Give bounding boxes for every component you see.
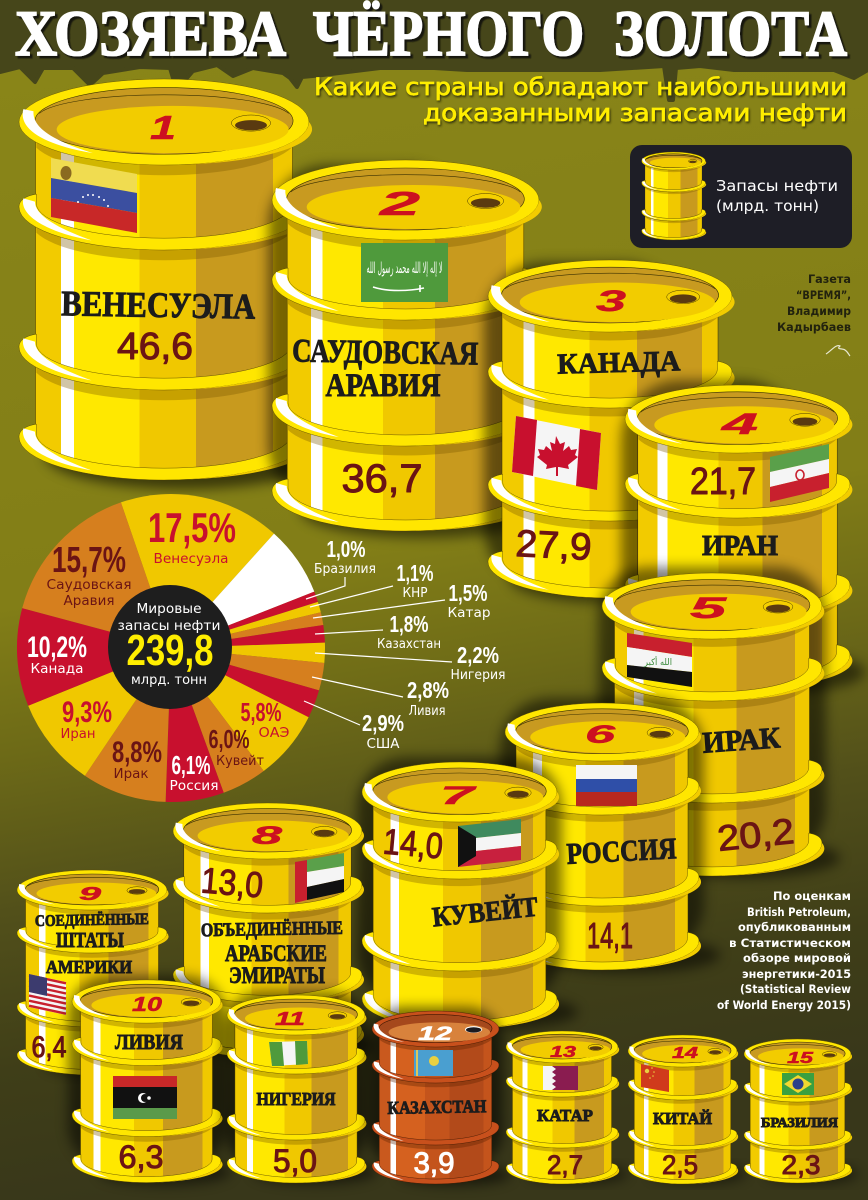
value: 2,7 xyxy=(547,1150,583,1180)
barrel 5: Iraq xyxy=(598,567,840,878)
source note: По оценкам xyxy=(773,889,851,903)
country name: РОССИЯ xyxy=(566,832,678,871)
external labels: 2,2% xyxy=(457,642,499,668)
external labels: Казахстан xyxy=(377,637,441,652)
country name xyxy=(201,918,343,988)
source note: British Petroleum, xyxy=(747,905,851,919)
leader lines xyxy=(304,577,452,725)
drum xyxy=(19,79,312,480)
country name: КАЗАХСТАН xyxy=(387,1096,487,1118)
shadow xyxy=(205,1030,375,1060)
country name: ОБЪЕДИНЁННЫЕ xyxy=(201,918,343,941)
external labels: Катар xyxy=(448,606,490,621)
source note: of World Energy 2015) xyxy=(717,998,851,1012)
source note: обзоре мировой xyxy=(743,951,851,965)
slice labels: 17,5% xyxy=(148,504,236,551)
shadow xyxy=(598,567,840,878)
external labels: 2,9% xyxy=(362,710,404,736)
value: 14,0 xyxy=(381,821,445,867)
slice labels: 15,7% xyxy=(52,539,126,580)
flag: Canada xyxy=(512,416,601,490)
slice labels: 10,2% xyxy=(27,631,87,664)
flag: Iraq xyxy=(627,633,692,687)
country name: АМЕРИКИ xyxy=(46,957,132,977)
shadow xyxy=(500,698,720,973)
drum xyxy=(372,1011,499,1184)
external labels: Нигерия xyxy=(450,668,506,683)
country name: БРАЗИЛИЯ xyxy=(761,1115,838,1130)
external labels: 2,8% xyxy=(407,677,449,703)
rank: 1 xyxy=(150,109,176,146)
shadow xyxy=(223,991,377,1184)
value: 6,3 xyxy=(118,1139,164,1175)
value: 27,9 xyxy=(515,523,593,569)
country name: КУВЕЙТ xyxy=(431,892,540,934)
external labels: Бразилия xyxy=(314,562,376,577)
drum xyxy=(173,803,364,1058)
country name: КАТАР xyxy=(537,1106,593,1125)
slice labels: Канада xyxy=(30,662,84,677)
drum xyxy=(362,762,559,1029)
country name: ЛИВИЯ xyxy=(115,1030,183,1054)
source note: (Statistical Review xyxy=(740,982,851,996)
rank: 9 xyxy=(79,884,101,904)
barrel 9: USA xyxy=(17,870,175,1077)
barrel 10: Libya xyxy=(68,976,231,1185)
value: 2,5 xyxy=(662,1150,698,1180)
country name: ИРАК xyxy=(701,721,782,760)
barrel 1: Venezuela xyxy=(19,79,325,489)
value: 6,4 xyxy=(32,1031,66,1064)
slice labels xyxy=(27,504,290,794)
country name: ВЕНЕСУЭЛА xyxy=(61,283,256,327)
barrel 2: Saudi Arabia xyxy=(268,160,550,538)
title xyxy=(15,0,847,70)
barrel 12: Kazakhstan xyxy=(368,1007,511,1185)
rank: 8 xyxy=(252,822,282,850)
shadow xyxy=(45,421,325,489)
flag: Nigeria xyxy=(269,1041,308,1066)
value: 21,7 xyxy=(690,461,756,503)
drum xyxy=(602,573,824,876)
shadow xyxy=(268,165,550,538)
shadow xyxy=(357,757,578,1029)
barrel 15: Brazil xyxy=(744,1039,858,1184)
rank: 11 xyxy=(275,1009,305,1029)
centre disc: 239,8 xyxy=(126,626,214,675)
country name: САУДОВСКАЯ xyxy=(292,333,479,373)
credit text: Газета xyxy=(808,272,851,286)
external labels: 1,8% xyxy=(390,611,428,637)
flag: Iraq: الله أكبر xyxy=(643,656,672,668)
drum xyxy=(488,260,735,598)
country name xyxy=(35,910,149,977)
shadow xyxy=(484,262,740,604)
rank: 13 xyxy=(550,1044,576,1061)
credit text: Владимир xyxy=(787,304,851,318)
shadow xyxy=(45,1053,175,1077)
legend text: (млрд. тонн) xyxy=(716,197,819,215)
subtitle: доказанными запасами нефти xyxy=(423,99,847,127)
flag: Brazil xyxy=(782,1073,814,1095)
subtitle: Какие страны обладают наибольшими xyxy=(314,73,847,101)
rank: 3 xyxy=(596,285,627,318)
dripping oil header band xyxy=(0,0,868,100)
title: ХОЗЯЕВА xyxy=(15,0,286,70)
rank: 10 xyxy=(132,994,162,1016)
external labels: КНР xyxy=(402,586,428,601)
country name: КИТАЙ xyxy=(653,1109,712,1128)
flag: Kazakhstan xyxy=(414,1050,453,1076)
slice labels: ОАЭ xyxy=(258,726,290,741)
value: 5,0 xyxy=(273,1143,317,1179)
drum xyxy=(744,1039,852,1183)
shadow xyxy=(368,1007,511,1185)
country name: ИРАН xyxy=(702,530,778,562)
slice labels: 6,1% xyxy=(172,750,210,780)
credit text: Кадырбаев xyxy=(777,320,851,334)
legend text: Запасы нефти xyxy=(716,177,838,195)
barrel 3: Canada xyxy=(484,260,740,604)
slice labels: Кувейт xyxy=(216,754,264,769)
country name: АРАВИЯ xyxy=(326,368,441,404)
shadow xyxy=(621,380,865,694)
centre disc: запасы нефти xyxy=(118,619,220,634)
flag: USA xyxy=(29,974,66,1015)
drum xyxy=(625,385,852,689)
barrel 4: Iran xyxy=(621,380,865,694)
country name: ЭМИРАТЫ xyxy=(229,963,325,988)
country name xyxy=(292,333,479,404)
legend barrel icon xyxy=(642,152,706,240)
drum xyxy=(72,980,223,1183)
legend panel xyxy=(630,145,852,248)
value: 2,3 xyxy=(782,1150,820,1180)
title: ЧЁРНОГО xyxy=(313,0,584,70)
slice labels: Иран xyxy=(60,727,96,742)
drum xyxy=(227,995,366,1183)
rank: 2 xyxy=(378,185,421,222)
slice labels: 5,8% xyxy=(240,697,282,727)
centre disc: Мировые xyxy=(136,602,202,617)
source note: в Статистическом xyxy=(729,936,851,950)
flag: Kuwait xyxy=(458,819,521,867)
value: 20,2 xyxy=(715,810,796,859)
drum xyxy=(628,1035,738,1184)
slice labels: Саудовская xyxy=(46,578,132,593)
rank: 15 xyxy=(787,1050,815,1067)
value: 3,9 xyxy=(414,1147,454,1180)
source note xyxy=(717,889,851,1012)
flag: Iran xyxy=(770,444,829,502)
rank: 12 xyxy=(418,1024,453,1045)
barrel 14: China xyxy=(628,1035,746,1184)
drum xyxy=(17,870,169,1075)
barrel 2: Saudi Arabia: لا إله إلا الله محمد رسول الله xyxy=(366,259,442,277)
slice labels: Аравия xyxy=(64,594,114,609)
external labels: 1,0% xyxy=(326,536,366,562)
external labels: США xyxy=(366,737,400,752)
credit text xyxy=(777,272,851,356)
external labels: 1,1% xyxy=(396,560,434,586)
flag: Qatar xyxy=(543,1066,578,1090)
source note: опубликованным xyxy=(738,920,851,934)
external labels xyxy=(314,536,506,752)
barrel 8: UAE xyxy=(173,803,375,1060)
subtitle xyxy=(314,73,847,127)
external labels: Ливия xyxy=(408,704,446,719)
flag: UAE xyxy=(295,853,344,903)
slice labels: 8,8% xyxy=(112,736,162,769)
shadow xyxy=(68,976,231,1185)
drum xyxy=(506,1031,619,1184)
country name: НИГЕРИЯ xyxy=(256,1089,336,1109)
rank: 7 xyxy=(440,782,477,810)
barrel 11: Nigeria xyxy=(223,991,377,1184)
rank: 4 xyxy=(720,408,759,441)
centre disc: млрд. тонн xyxy=(131,673,207,688)
legend text xyxy=(716,177,838,215)
slice labels: Россия xyxy=(170,779,218,794)
country name: ШТАТЫ xyxy=(56,928,124,952)
flag: Saudi Arabia xyxy=(361,243,448,302)
drum xyxy=(272,160,542,531)
credit text: “ВРЕМЯ”, xyxy=(796,288,851,302)
country name: КАНАДА xyxy=(557,345,681,381)
barrel 13: Qatar xyxy=(506,1031,628,1184)
slice labels: Венесуэла xyxy=(154,552,228,567)
pie chart: world oil reserves xyxy=(17,494,505,802)
barrel 7: Kuwait xyxy=(357,757,578,1029)
drum xyxy=(505,703,701,970)
value: 13,0 xyxy=(199,859,265,906)
centre disc xyxy=(108,585,232,709)
slice labels: Ирак xyxy=(114,767,149,782)
flag: China xyxy=(641,1064,669,1092)
barrel 6: Russia xyxy=(500,698,720,973)
external labels: 1,5% xyxy=(448,580,488,606)
shadow xyxy=(766,1164,858,1184)
value: 46,6 xyxy=(117,326,193,368)
pie sectors xyxy=(17,494,325,802)
country name: АРАБСКИЕ xyxy=(225,941,327,966)
country name: СОЕДИНЁННЫЕ xyxy=(35,910,149,930)
value: 14,1 xyxy=(587,915,633,956)
flag: Russia xyxy=(576,765,637,806)
rank: 5 xyxy=(690,592,729,625)
shadow xyxy=(528,1164,628,1184)
slice labels: 6,0% xyxy=(208,724,250,754)
rank: 14 xyxy=(672,1045,698,1062)
slice labels: 9,3% xyxy=(62,696,112,729)
flag: Venezuela xyxy=(51,158,137,233)
value: 36,7 xyxy=(342,457,422,501)
source note: энергетики-2015 xyxy=(742,967,851,981)
flag: Libya xyxy=(113,1076,177,1119)
shadow xyxy=(650,1164,746,1184)
rank: 6 xyxy=(585,721,617,749)
